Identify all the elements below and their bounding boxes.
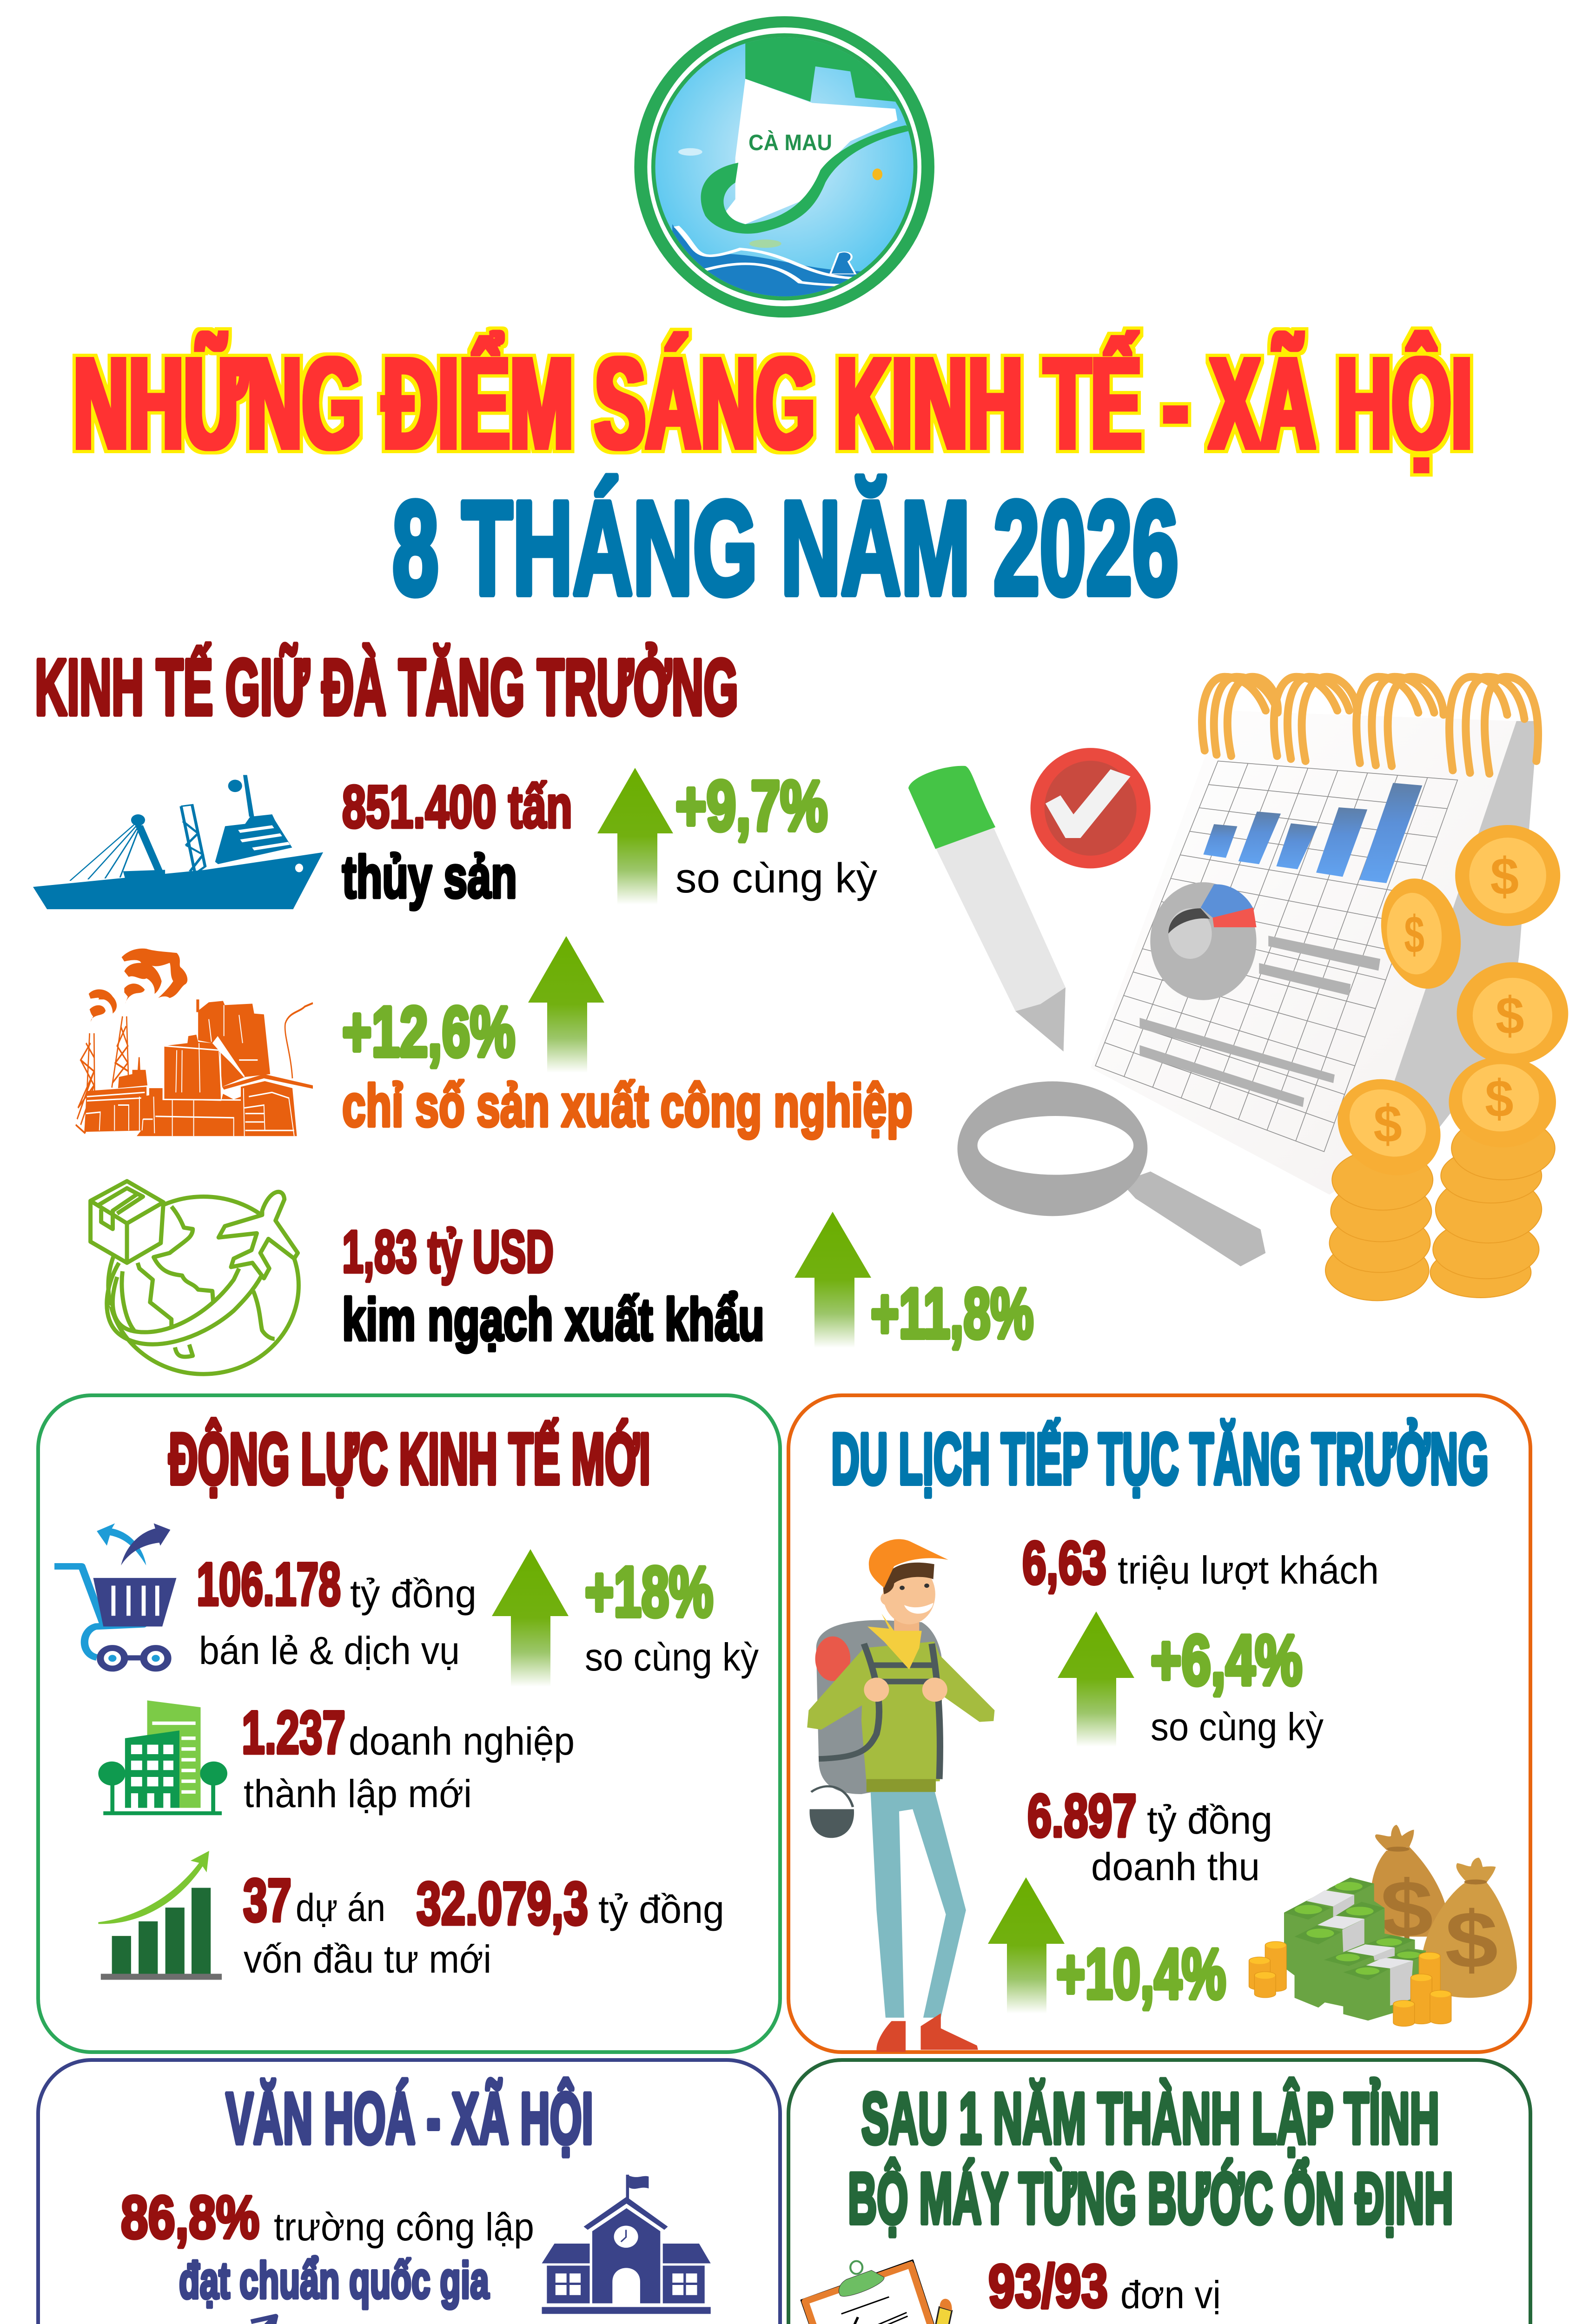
stat: projects unit: dự án xyxy=(296,1886,385,1929)
comparison label: so cùng kỳ xyxy=(585,1635,759,1679)
donut chart xyxy=(1150,882,1257,1000)
arrow up xyxy=(988,1877,1065,2014)
logo wordmark: CÀ MAU xyxy=(748,130,832,155)
calendar and coin art xyxy=(1091,677,1568,1301)
icon: worker with briefcase and gear xyxy=(85,2316,293,2324)
stat: retail unit: tỷ đồng xyxy=(350,1572,477,1616)
back page xyxy=(1394,721,1538,1127)
panel heading: ĐỘNG LỰC KINH TẾ MỚI xyxy=(169,1419,650,1499)
check badge xyxy=(1031,748,1151,868)
panel: culture and society xyxy=(38,2060,780,2324)
illustration: calendar report with coins xyxy=(908,677,1568,1301)
panel frame xyxy=(788,1395,1530,2052)
arrow up xyxy=(794,1212,871,1348)
stat: industry label: chỉ số sản xuất công nghiệp xyxy=(342,1073,913,1139)
section heading: KINH TẾ GIỮ ĐÀ TĂNG TRƯỞNG xyxy=(35,643,738,732)
stat: seafood label: thủy sản xyxy=(342,844,517,911)
stat: export growth: +11,8% xyxy=(871,1274,1033,1353)
stat: export label: kim ngạch xuất khẩu xyxy=(342,1287,764,1353)
illustration: backpacker xyxy=(807,1539,994,2052)
chart grid xyxy=(1095,761,1457,1152)
panel frame xyxy=(38,2060,780,2324)
icon: checklist clipboard xyxy=(801,2260,962,2324)
coin dollar signs: $ xyxy=(1404,905,1424,964)
stat: units: 93/93 xyxy=(988,2252,1108,2320)
stat: export value: 1,83 tỷ USD xyxy=(342,1219,554,1285)
stat: enterprises label: thành lập mới xyxy=(244,1772,472,1816)
stat: visitors unit: triệu lượt khách xyxy=(1118,1548,1379,1592)
arrow up xyxy=(1058,1611,1134,1747)
stat: seafood growth: +9,7% xyxy=(675,766,828,845)
arrow up xyxy=(597,768,673,905)
panel heading: VĂN HOÁ - XÃ HỘI xyxy=(226,2078,593,2159)
panel frame xyxy=(788,2060,1530,2324)
stat: visitors growth: +6,4% xyxy=(1151,1621,1302,1700)
icon: export globe xyxy=(91,1181,298,1374)
report lines xyxy=(1139,936,1380,1107)
icon: school xyxy=(542,2175,711,2314)
icon: money bags and cash: $ xyxy=(1380,1864,1433,1954)
stat: standard schools: 86,8% xyxy=(121,2183,259,2251)
bars xyxy=(1203,783,1422,883)
coins xyxy=(1334,825,1568,1185)
stat: seafood value: 851.400 tấn xyxy=(342,774,572,840)
coin dollar signs: $ xyxy=(1490,847,1519,906)
icon: shopping cart xyxy=(54,1523,176,1669)
icon: money bags and cash: $ xyxy=(1445,1895,1498,1985)
stat: investment label: vốn đầu tư mới xyxy=(244,1937,491,1981)
stat: investment unit: tỷ đồng xyxy=(598,1888,724,1931)
icon: growth chart xyxy=(98,1851,222,1980)
stat: industry growth: +12,6% xyxy=(342,992,515,1071)
stat: retail value: 106.178 xyxy=(197,1550,341,1618)
icon: factory xyxy=(76,949,313,1136)
icon: money bags and cash xyxy=(1249,1825,1517,2027)
coin dollar signs xyxy=(1373,847,1524,1153)
coin stacks xyxy=(1325,1117,1555,1301)
pencil xyxy=(908,766,1066,1051)
stat: revenue unit: tỷ đồng xyxy=(1147,1798,1272,1842)
stat: units noun: đơn vị xyxy=(1120,2273,1221,2317)
panel: new economic drivers xyxy=(38,1395,780,2052)
stat: new enterprises: 1.237 xyxy=(242,1698,345,1766)
magnifier xyxy=(957,1082,1265,1266)
comparison label: so cùng kỳ xyxy=(1151,1705,1324,1749)
icon: office buildings xyxy=(98,1700,227,1815)
section: economy growth xyxy=(33,643,1568,1374)
coin dollar signs: $ xyxy=(1373,1095,1402,1153)
stat: schools label: đạt chuẩn quốc gia xyxy=(179,2252,490,2309)
stat: revenue label: doanh thu xyxy=(1091,1845,1260,1888)
stat: investment: 32.079,3 xyxy=(417,1869,588,1937)
panel frame xyxy=(38,1395,780,2052)
coin dollar signs: $ xyxy=(1485,1069,1514,1128)
arrow up xyxy=(528,936,604,1073)
stat: enterprises unit: doanh nghiệp xyxy=(349,1719,575,1763)
icon: fishing ship xyxy=(33,775,323,909)
spiral rings xyxy=(1202,677,1538,774)
stat: revenue growth: +10,4% xyxy=(1056,1934,1226,2014)
logo: Ca Mau province emblem xyxy=(634,16,934,317)
stat: visitors: 6,63 xyxy=(1022,1529,1106,1597)
stat: tourism revenue: 6.897 xyxy=(1027,1782,1137,1849)
panel: tourism xyxy=(788,1395,1530,2052)
coin dollar signs: $ xyxy=(1496,986,1524,1045)
stat: retail label: bán lẻ & dịch vụ xyxy=(199,1629,460,1672)
comparison label: so cùng kỳ xyxy=(675,855,877,902)
stat: projects: 37 xyxy=(243,1866,291,1934)
stat: schools unit: trường công lập xyxy=(274,2205,534,2249)
stat: retail growth: +18% xyxy=(585,1552,713,1631)
arrow up xyxy=(492,1549,569,1687)
pencil, badge and magnifier xyxy=(908,748,1265,1266)
panel: one year after province founding xyxy=(788,2060,1530,2324)
